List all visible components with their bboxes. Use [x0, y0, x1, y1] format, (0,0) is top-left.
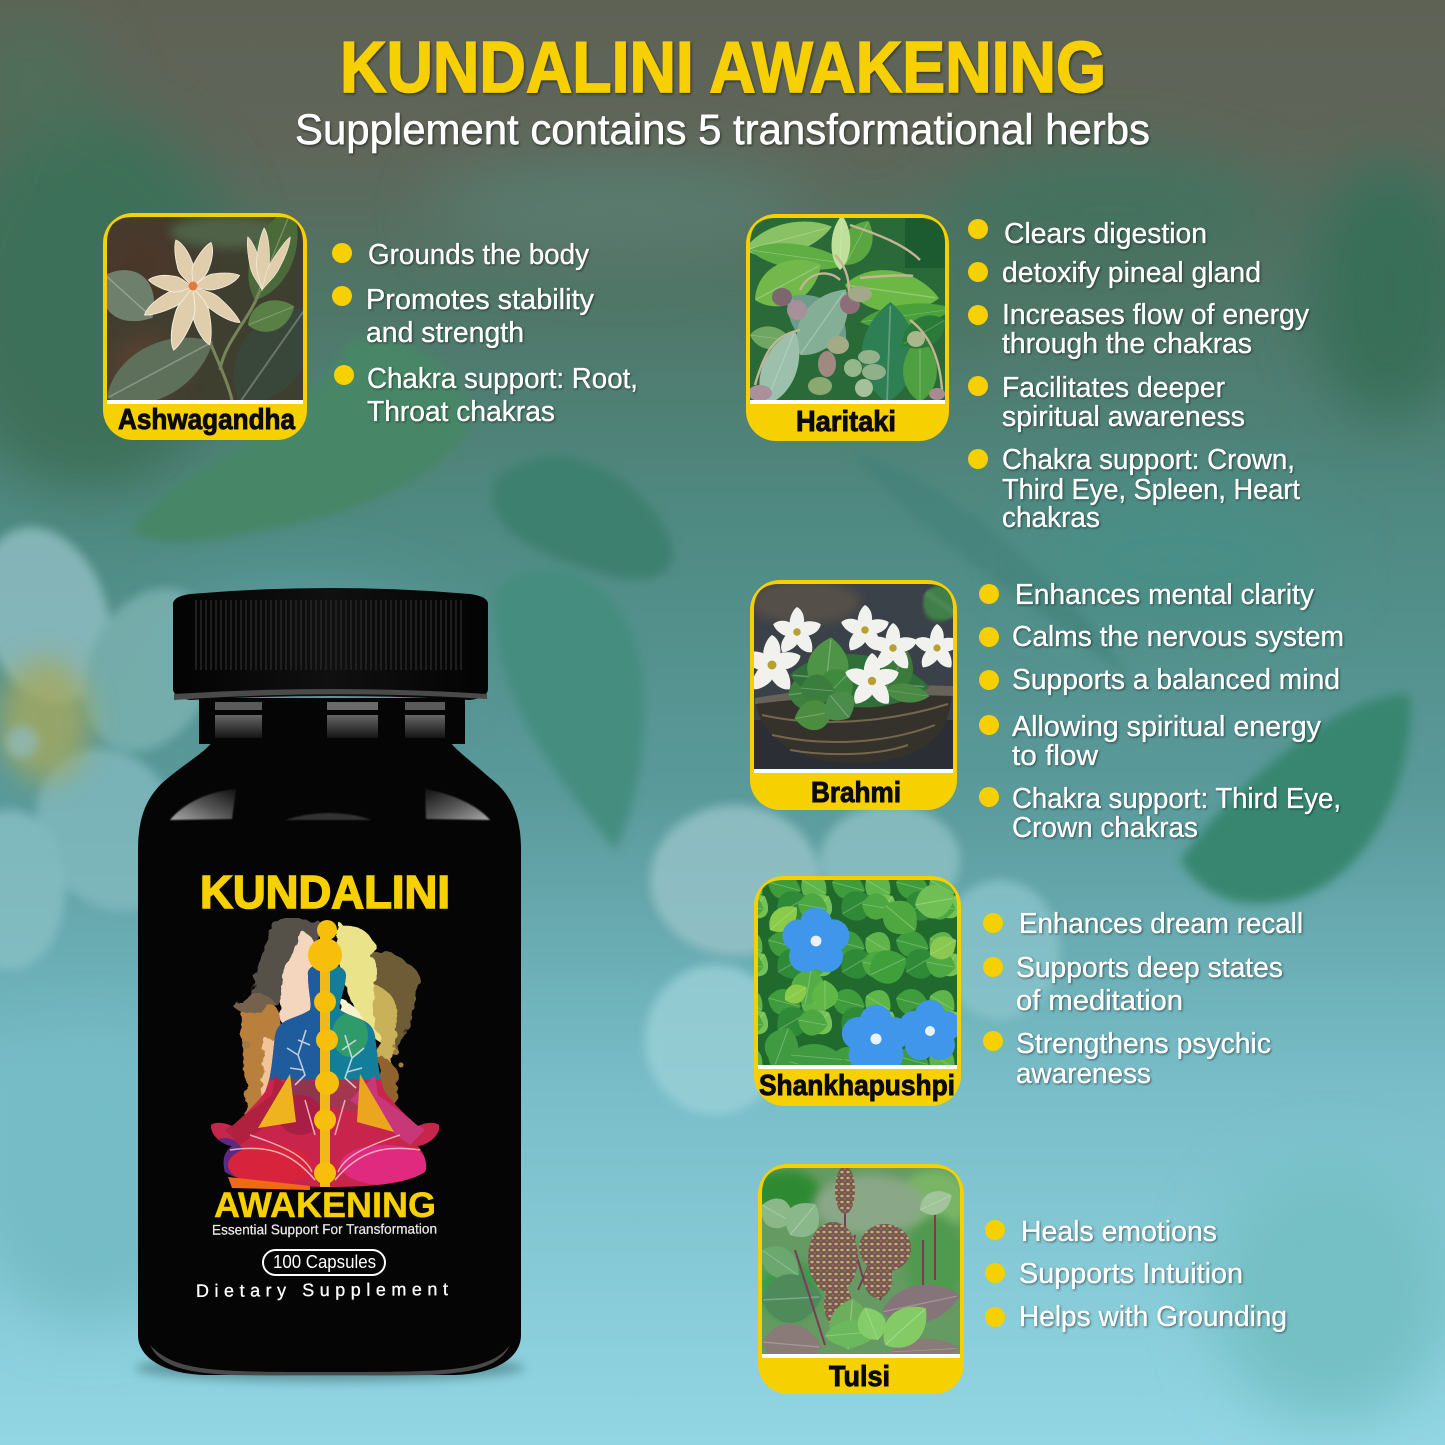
- bullet: Clears digestion: Clears digestion: [1004, 218, 1207, 250]
- shoulder highlights: [170, 789, 490, 820]
- panel: Shankhapushpi card: [754, 876, 962, 1106]
- bullet: Heals emotions: Heals emotions: [1021, 1216, 1217, 1248]
- bullet: Supports deep states: [983, 952, 1283, 1017]
- title: KUNDALINI AWAKENING: [340, 28, 1106, 108]
- photo: Tulsi plant: [762, 1168, 960, 1354]
- bullet: Promotes stability: and strength: [366, 317, 524, 349]
- bullet: Allowing spiritual energy: [979, 711, 1321, 772]
- bullet: Chakra support Crown: Third Eye, Spleen, Heart: [1002, 474, 1300, 506]
- panel: Ashwagandha card: [103, 213, 307, 440]
- bullet: Helps with Grounding: Helps with Grounding: [1019, 1301, 1287, 1333]
- bullet: Promotes stability: [332, 284, 594, 349]
- bullet: Increases flow of energy: [968, 299, 1309, 360]
- list: Haritaki benefits: [968, 218, 1309, 534]
- meditating figure with chakras: [205, 919, 445, 1195]
- list: Ashwagandha benefits: [332, 239, 638, 428]
- bullet: Chakra support Third Eye: Crown chakras: [1012, 812, 1198, 844]
- bullet: Strengthens psychic: awareness: [1016, 1058, 1151, 1090]
- subtitle: Supplement contains 5 transformational herbs: [295, 106, 1150, 154]
- panel: Brahmi card: [741, 577, 969, 810]
- bullet: Chakra support: Chakra support: Root,: [367, 363, 638, 395]
- bottle label: Dietary Supplement: Dietary Supplement: [196, 1279, 448, 1301]
- list: Shankhapushpi benefits: [983, 908, 1303, 1090]
- label: Brahmi: Brahmi: [811, 777, 901, 809]
- bullet: Increases flow of energy: Increases flow of energy: [1002, 299, 1309, 331]
- silhouette colour washes: [210, 966, 440, 1187]
- bullet: Calms the nervous system: Calms the nervous system: [1012, 621, 1344, 653]
- panel: Haritaki card: [741, 212, 956, 441]
- bottle cap: [173, 588, 488, 700]
- bullet: Facilitates deeper: [968, 372, 1245, 433]
- photo: Haritaki fruit and leaves: [750, 218, 945, 400]
- label: Ashwagandha: Ashwagandha: [118, 404, 296, 436]
- bullet: Allowing spiritual energy: to flow: [1012, 740, 1099, 772]
- smoke and flame washes: [232, 919, 422, 1115]
- list: Tulsi benefits: [985, 1216, 1287, 1333]
- photo: Ashwagandha flower: [107, 217, 303, 400]
- bullet: Enhances dream recall: Enhances dream recall: [1019, 908, 1303, 940]
- bullet: Grounds the body: Grounds the body: [368, 239, 589, 271]
- bullet: Supports a balanced mind: Supports a balanced mind: [1012, 664, 1340, 696]
- bullet: Strengthens psychic: [983, 1028, 1271, 1090]
- bottle label: KUNDALINI: KUNDALINI: [200, 866, 450, 918]
- bullet: Chakra support Third Eye: [979, 783, 1341, 844]
- bottle label: tagline: Essential Support For Transformation: [212, 1220, 437, 1238]
- label: Tulsi: Tulsi: [829, 1361, 890, 1393]
- bullet: Enhances mental clarity: Enhances mental clarity: [1015, 579, 1314, 611]
- bullet: Facilitates deeper: spiritual awareness: [1002, 401, 1245, 433]
- bullet: Chakra support Third Eye: Chakra support: Third Eye,: [1012, 783, 1341, 815]
- bullet: Chakra support: [334, 363, 638, 428]
- bullet: Chakra support Crown: Chakra support: Crown,: [1002, 444, 1295, 476]
- bullet: Chakra support: Throat chakras: [367, 396, 555, 428]
- label: Haritaki: Haritaki: [796, 406, 896, 438]
- bottle label: 100 Capsules pill: 100 Capsules: [273, 1252, 376, 1272]
- bullet: detoxify pineal gland: detoxify pineal gland: [1002, 257, 1261, 289]
- bullet: Strengthens psychic: Strengthens psychic: [1016, 1028, 1271, 1060]
- photo: Brahmi flowers in bowl: [754, 584, 953, 769]
- photo: Shankhapushpi blue flowers: [758, 880, 962, 1073]
- list: Brahmi benefits: [979, 579, 1344, 844]
- label: Shankhapushpi: Shankhapushpi: [759, 1070, 955, 1102]
- bottle body: [138, 742, 521, 1375]
- panel: Tulsi card: [750, 1164, 970, 1394]
- bullet: Promotes stability: Promotes stability: [366, 284, 594, 316]
- bottle neck: [199, 698, 465, 744]
- bullet: Increases flow of energy: through the chakras: [1002, 328, 1252, 360]
- bullet: Supports deep states: of meditation: [1016, 985, 1183, 1017]
- bullet: Allowing spiritual energy: Allowing spiritual energy: [1012, 711, 1321, 743]
- product bottle: [135, 588, 525, 1382]
- bullet: Chakra support Crown: [968, 444, 1300, 534]
- bottle label: AWAKENING: AWAKENING: [214, 1186, 436, 1225]
- bullet: Facilitates deeper: Facilitates deeper: [1002, 372, 1225, 404]
- bullet: Supports Intuition: Supports Intuition: [1019, 1258, 1243, 1290]
- bullet: Chakra support Crown: chakras: [1002, 502, 1100, 534]
- bullet: Supports deep states: Supports deep states: [1016, 952, 1283, 984]
